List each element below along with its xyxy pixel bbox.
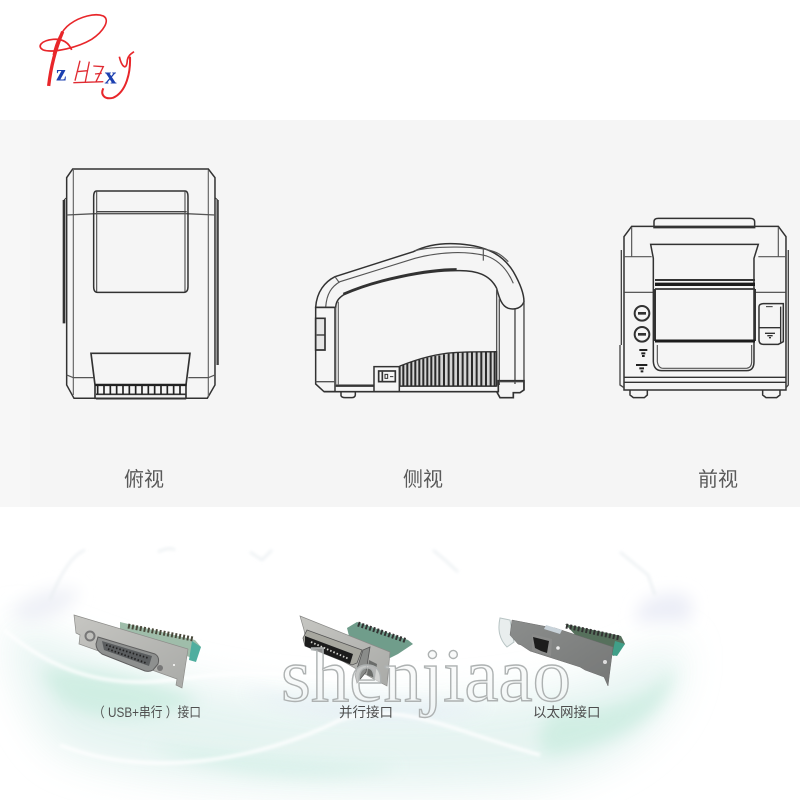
panel: interface options [4, 549, 692, 789]
label: front view: 前视 [698, 468, 738, 491]
label: side view: 侧视 [403, 468, 443, 491]
connector: parallel card [300, 616, 413, 686]
label: top view: 俯视 [124, 468, 164, 491]
water background [4, 549, 692, 789]
logo: x [105, 63, 117, 89]
connector: USB + serial card [74, 615, 201, 688]
watermark: shenjiaao [281, 634, 571, 718]
logo [40, 15, 134, 98]
top-view printer drawing [64, 169, 218, 399]
front-view printer drawing [620, 218, 788, 398]
side-view printer drawing [316, 244, 524, 398]
label: parallel: 并行接口 [339, 704, 393, 720]
panel: printer views [0, 120, 800, 507]
label: ethernet: 以太网接口 [533, 704, 600, 720]
connector: ethernet card [499, 618, 625, 686]
label: USB + serial: （ USB+串行 ）接口 [93, 704, 201, 720]
logo: z [56, 60, 66, 86]
